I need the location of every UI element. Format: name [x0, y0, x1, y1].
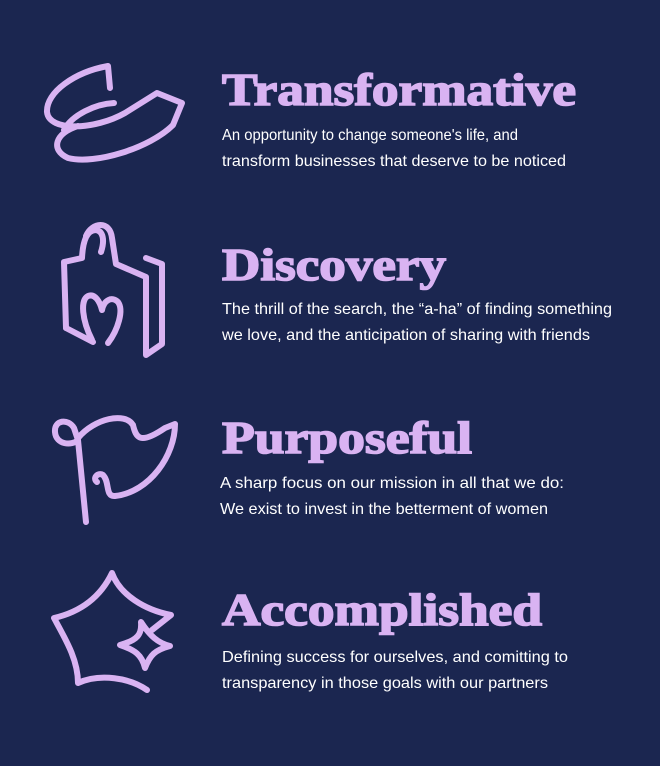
text: accomplished description: Defining success for ourselves, and comitting to: [222, 649, 568, 666]
heading: Accomplished: Accomplished: [222, 584, 542, 635]
heading: Purposeful: Purposeful: [222, 412, 472, 463]
text: purposeful line 2: We exist to invest in the betterment of women: [220, 501, 548, 518]
text: transformative line 2: transform businesses that deserve to be noticed: [222, 153, 566, 170]
text: accomplished line 2: transparency in those goals with our partners: [222, 675, 548, 692]
text: discovery description: The thrill of the search, the “a-ha” of finding something: [222, 301, 612, 318]
icon: shopping bag with heart: [64, 225, 162, 355]
text: discovery line 2: we love, and the anticipation of sharing with friends: [221, 327, 590, 344]
text: transformative description: An opportunity to change someone's life, and: [222, 127, 518, 144]
icon: ribbon: [47, 66, 182, 160]
icon: flag: [55, 418, 175, 522]
icon: stars: [54, 573, 171, 690]
text: purposeful description: A sharp focus on our mission in all that we do:: [220, 475, 564, 492]
heading: Discovery: Discovery: [222, 239, 446, 290]
heading: Transformative: Transformative: [222, 64, 576, 115]
